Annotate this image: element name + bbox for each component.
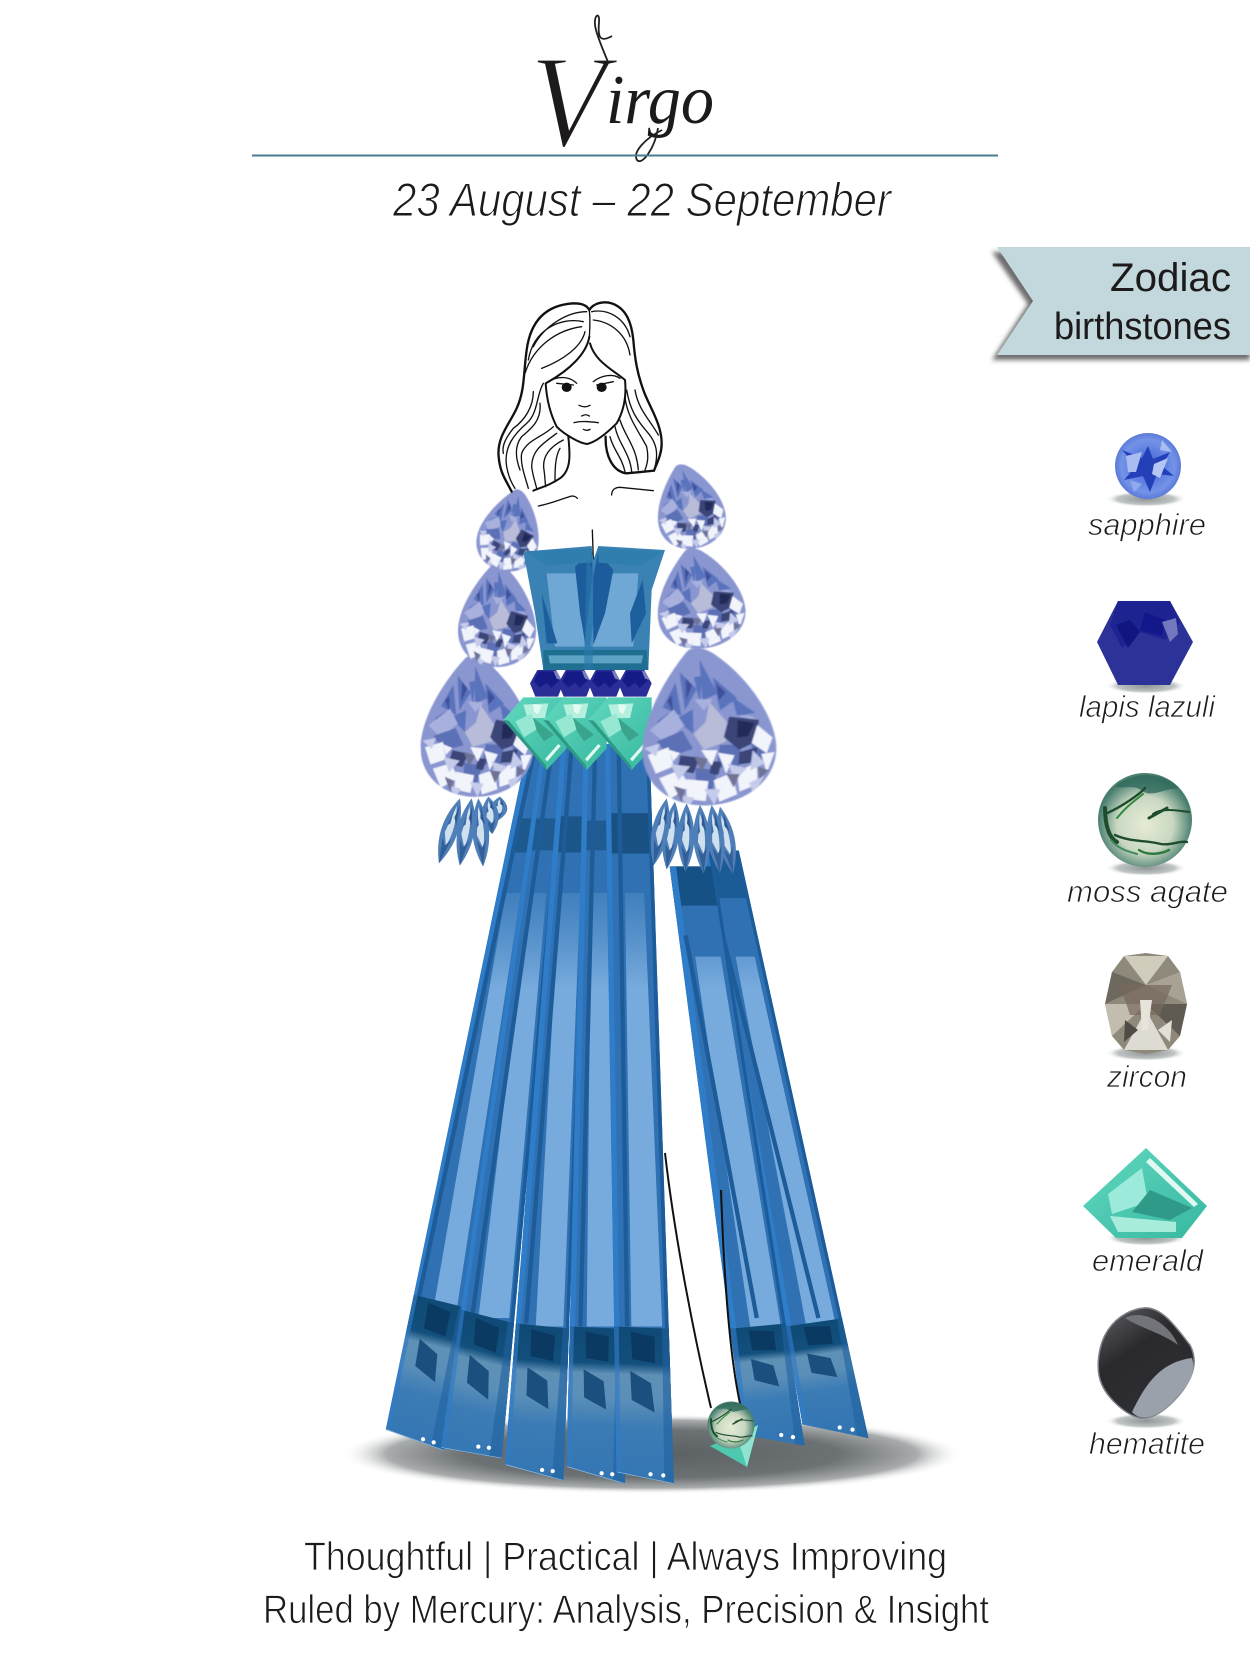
right cuff marquise gems — [645, 797, 741, 875]
title: Virgo: irgo — [606, 62, 714, 139]
gem: lapis lazuli — [1079, 601, 1216, 724]
label: zircon: zircon — [1106, 1059, 1187, 1094]
title: Virgo — [530, 16, 714, 175]
ribbon: Zodiac birthstones: Zodiac — [1110, 256, 1231, 300]
figure: fashion illustration in gem gown — [340, 302, 964, 1512]
gem: zircon — [1105, 953, 1187, 1094]
title: Virgo: V — [530, 28, 619, 175]
ribbon: Zodiac birthstones — [992, 247, 1250, 360]
right sleeve big sapphire drop — [621, 631, 791, 821]
gem: moss agate — [1067, 773, 1228, 909]
ground shadow — [340, 1414, 964, 1494]
right sleeve sapphire drops, upper — [642, 453, 756, 660]
legs outline — [665, 1153, 741, 1408]
gown skirt made of gem strips — [363, 739, 893, 1512]
belt: lapis lazuli row — [530, 670, 652, 697]
footer traits: Thoughtful | Practical | Always Improving — [304, 1535, 947, 1579]
shoe pendant: moss agate and emerald — [708, 1402, 758, 1467]
label: hematite: hematite — [1089, 1426, 1205, 1461]
label: sapphire: sapphire — [1088, 507, 1206, 542]
label: lapis lazuli: lapis lazuli — [1079, 689, 1216, 724]
title divider line — [252, 154, 998, 156]
gem: hematite — [1089, 1308, 1205, 1461]
hair, face and neckline line art — [498, 302, 662, 560]
footer ruling planet: Ruled by Mercury: Analysis, Precision & Insight — [263, 1588, 989, 1632]
ribbon: Zodiac birthstones: birthstones — [1054, 306, 1231, 348]
date range: 23 August – 22 September — [392, 173, 893, 226]
left cuff marquise gems — [431, 796, 508, 867]
belt: emerald row — [503, 697, 652, 770]
gem: emerald — [1083, 1148, 1207, 1278]
label: emerald: emerald — [1092, 1243, 1205, 1278]
label: moss agate: moss agate — [1067, 874, 1228, 909]
bodice: faceted aquamarine — [523, 546, 665, 670]
left sleeve sapphire drops — [410, 479, 553, 805]
gem: sapphire — [1088, 433, 1206, 542]
infographic canvas — [252, 14, 1250, 1632]
